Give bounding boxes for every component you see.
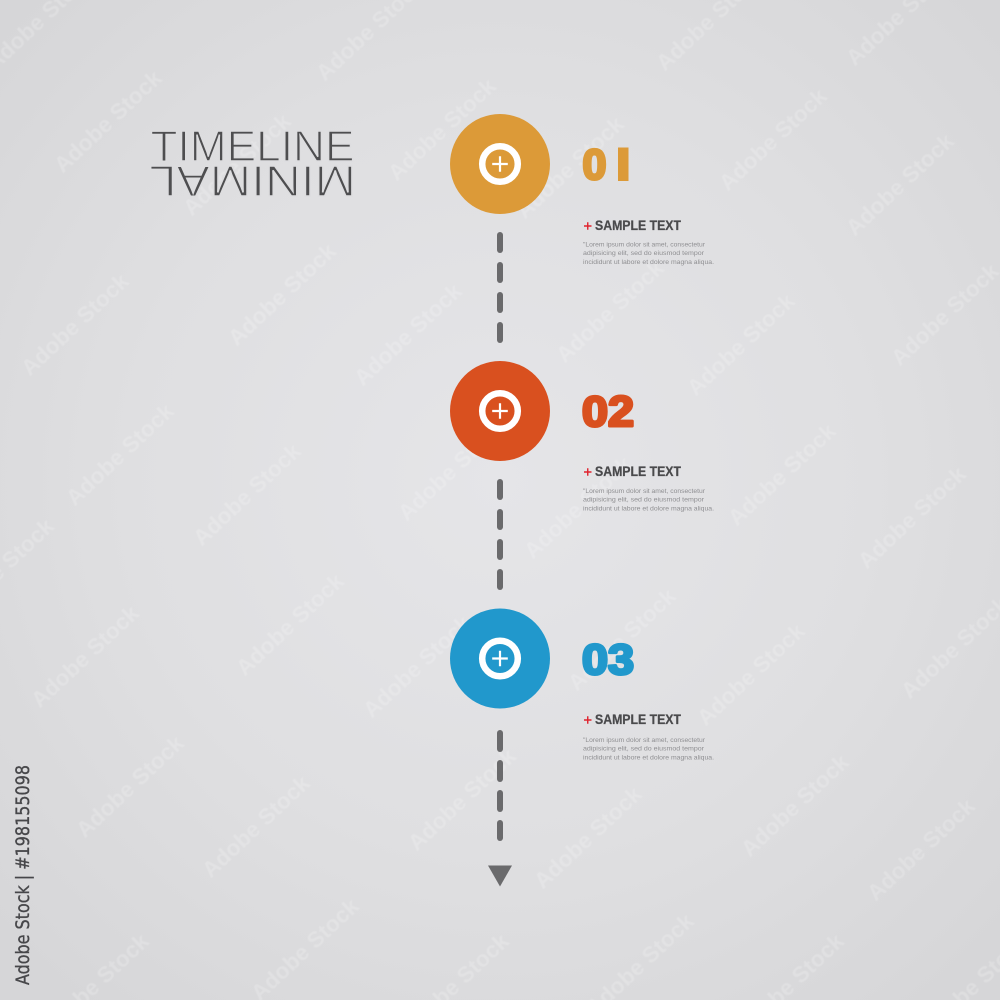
watermark pattern: Adobe Stock	[358, 610, 476, 723]
watermark pattern: Adobe Stock	[862, 793, 980, 906]
watermark pattern: Adobe Stock	[178, 108, 296, 221]
dashed connector 1	[497, 232, 503, 343]
icon: blue circle with plus	[450, 608, 550, 708]
heading: SAMPLE TEXT	[595, 712, 682, 727]
watermark pattern: Adobe Stock	[349, 278, 467, 391]
watermark pattern: Adobe Stock	[71, 730, 189, 843]
body text: "Lorem ipsum dolor sit amet, consectetur	[583, 737, 706, 744]
watermark pattern: Adobe Stock	[26, 600, 144, 713]
watermark pattern: Adobe Stock	[511, 111, 629, 224]
vertical stock credit: Adobe Stock | #198155098	[12, 765, 34, 985]
watermark pattern: Adobe Stock	[223, 238, 341, 351]
watermark pattern: Adobe Stock	[16, 268, 134, 381]
body text: adipisicing elit, sed do eiusmod tempor	[583, 496, 705, 504]
number 01: 1	[606, 142, 630, 190]
watermark pattern: Adobe Stock	[519, 451, 637, 564]
body text: incididunt ut labore et dolore magna aliqua.	[583, 506, 714, 512]
red plus	[584, 222, 592, 230]
icon: orange circle with plus	[450, 114, 550, 214]
number 03: 03	[582, 636, 634, 684]
number 02: 02	[582, 388, 634, 436]
body text: "Lorem ipsum dolor sit amet, consectetur	[583, 242, 706, 248]
watermark pattern: Adobe Stock	[682, 288, 800, 401]
watermark pattern: Adobe Stock	[736, 749, 854, 862]
watermark pattern: Adobe Stock	[383, 73, 501, 186]
title: TIMELINE / mirrored MINIMAL: TIMELINE	[150, 122, 354, 171]
watermark pattern: Adobe Stock	[714, 83, 832, 196]
step 02	[450, 361, 714, 512]
title: TIMELINE / mirrored MINIMAL	[149, 122, 356, 205]
number 01	[582, 148, 628, 181]
body text	[583, 737, 714, 762]
heading: SAMPLE TEXT	[595, 218, 682, 233]
watermark pattern: Adobe Stock	[551, 255, 669, 368]
dashed connector 3	[497, 730, 503, 841]
watermark pattern: Adobe Stock	[853, 461, 971, 574]
dashed connector 2	[497, 479, 503, 590]
watermark pattern: Adobe Stock	[49, 65, 167, 178]
body text: adipisicing elit, sed do eiusmod tempor	[583, 250, 705, 257]
watermark pattern: Adobe Stock	[841, 128, 959, 241]
watermark pattern: Adobe Stock	[188, 438, 306, 551]
watermark pattern: Adobe Stock	[231, 568, 349, 681]
body text: adipisicing elit, sed do eiusmod tempor	[583, 746, 705, 752]
body text	[583, 488, 714, 512]
arrow head	[488, 866, 512, 886]
watermark pattern: Adobe Stock	[529, 781, 647, 894]
red plus	[584, 468, 592, 476]
body text	[583, 242, 714, 266]
watermark pattern: Adobe Stock	[197, 770, 315, 883]
step 03	[450, 608, 714, 762]
watermark pattern: Adobe Stock	[692, 618, 810, 731]
step 01	[450, 114, 714, 266]
heading: SAMPLE TEXT	[595, 464, 682, 479]
body text: incididunt ut labore et dolore magna aliqua.	[583, 259, 714, 266]
number 01: 0	[582, 141, 606, 189]
red plus	[584, 716, 592, 724]
icon: red-orange circle with plus	[450, 361, 550, 461]
body text: "Lorem ipsum dolor sit amet, consectetur	[583, 488, 706, 495]
body text: incididunt ut labore et dolore magna aliqua.	[583, 754, 714, 762]
watermark pattern: Adobe Stock	[61, 398, 179, 511]
watermark pattern: Adobe Stock	[723, 418, 841, 531]
watermark pattern: Adobe Stock	[563, 583, 681, 696]
watermark pattern: Adobe Stock	[393, 413, 511, 526]
title: TIMELINE / mirrored MINIMAL: MINIMAL	[149, 156, 356, 205]
watermark pattern: Adobe Stock	[403, 743, 521, 856]
